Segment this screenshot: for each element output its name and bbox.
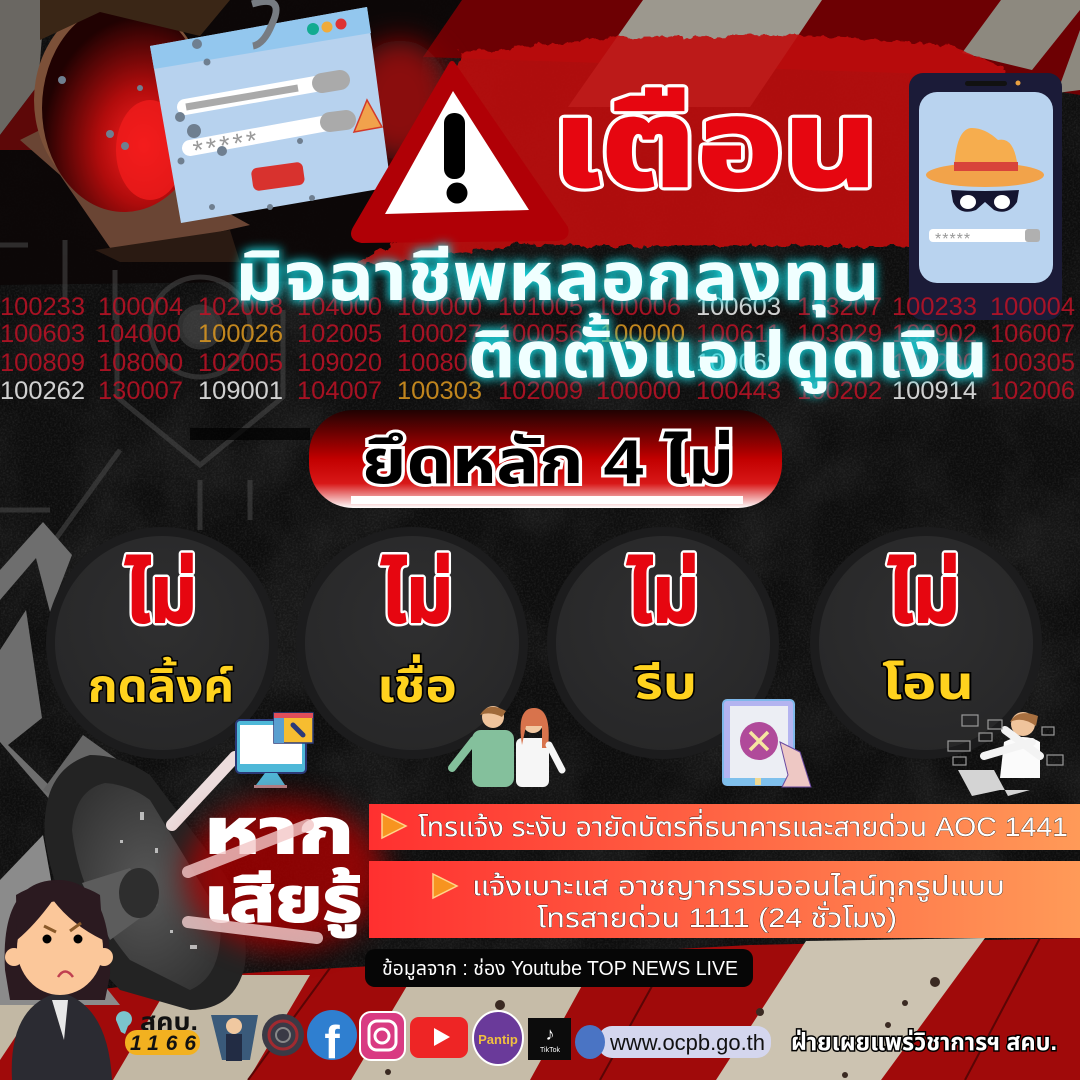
website link pill: www.ocpb.go.th <box>609 1030 765 1055</box>
panel: no believing <box>296 527 528 759</box>
logo: OCPB 1166: สคบ. <box>140 1008 198 1036</box>
code numbers grid: 101005 <box>498 293 583 321</box>
heading: if you lose money: เสียรู้ <box>204 866 362 938</box>
panel: no transferring: โอน <box>882 657 974 709</box>
heading: if you lose money: หาก <box>204 798 354 867</box>
faint arrow graphic left <box>0 522 72 800</box>
bar: report online crime hotline: โทรสายด่วน 1111 (24 ชั่วโมง) <box>537 901 897 933</box>
logo: facebook: f <box>324 1016 340 1068</box>
code numbers grid: 100262 <box>0 377 85 405</box>
source label: ข้อมูลจาก : ช่อง Youtube TOP NEWS LIVE <box>382 957 738 981</box>
banner: hold 4 no's: ยึดหลัก 4 ไม่ <box>362 428 734 497</box>
panel: no rushing: ไม่ <box>627 550 699 639</box>
icon: phone with hacker in hat: ***** <box>935 231 971 248</box>
code numbers grid: 100000 <box>397 293 482 321</box>
code numbers grid: 100809 <box>0 349 85 377</box>
logo: Pantip: Pantip <box>478 1032 518 1047</box>
panel: no clicking links: ไม่ <box>125 550 197 639</box>
heading: scam investment line 1: มิจฉาชีพหลอกลงทุน <box>235 239 880 318</box>
icon: two people talking <box>452 706 562 787</box>
code numbers grid: 100443 <box>696 377 781 405</box>
panel: no believing: ไม่ <box>381 550 453 639</box>
code numbers grid: 100914 <box>892 377 977 405</box>
code numbers grid: 100069 <box>696 349 781 377</box>
bar: report online crime hotline <box>369 861 1080 938</box>
code numbers grid: 103207 <box>797 293 882 321</box>
credit text: ฝ่ายเผยแพร่วิชาการฯ สคบ. <box>791 1028 1057 1056</box>
code numbers grid: 100303 <box>397 377 482 405</box>
panel: no rushing <box>547 527 779 759</box>
code numbers grid: 102008 <box>198 293 283 321</box>
code numbers grid: 104000 <box>297 293 382 321</box>
icon: fake login window: ***** <box>191 125 263 166</box>
icon: link on monitor <box>236 713 313 788</box>
code numbers grid: 109020 <box>297 349 382 377</box>
bar: freeze card hotline <box>369 804 1080 850</box>
code numbers grid: 100603 <box>696 293 781 321</box>
panel: no clicking links: กดลิ้งค์ <box>88 657 234 712</box>
panel: no believing: เชื่อ <box>377 654 457 712</box>
logo: youtube <box>410 1017 468 1058</box>
icon: man refusing at laptop <box>948 712 1063 796</box>
icon: fake login window <box>58 2 391 223</box>
logo: OCPB 1166 <box>116 1008 200 1055</box>
bar: freeze card hotline: โทรแจ้ง ระงับ อายัดบัตรที่ธนาคารและสายด่วน AOC 1441 <box>418 808 1068 842</box>
panel: no clicking links <box>46 527 278 759</box>
code numbers grid: 100056 <box>498 320 583 348</box>
code numbers grid: 100004 <box>98 293 183 321</box>
heading: scam investment line 1: มิจฉาชีพหลอกลงทุน <box>235 239 880 318</box>
code numbers grid: 100902 <box>892 320 977 348</box>
banner: hold 4 no's <box>190 410 782 508</box>
logo: Pantip <box>473 1011 523 1065</box>
logo: facebook <box>307 1010 357 1068</box>
code numbers grid: 100233 <box>892 293 977 321</box>
background: bottom red and wood stripes <box>0 938 1080 1080</box>
code numbers grid <box>0 293 1075 405</box>
title: warning word: เตือน <box>552 76 878 212</box>
illustration: angry woman in suit <box>5 880 113 1080</box>
code numbers grid: 103029 <box>797 320 882 348</box>
logo: instagram <box>360 1012 405 1060</box>
code numbers grid: 100004 <box>990 293 1075 321</box>
website link pill <box>575 1025 771 1059</box>
code numbers grid: 100800 <box>397 349 482 377</box>
logo: TikTok: ♪ <box>546 1024 554 1044</box>
logo: TikTok: TikTok <box>540 1047 560 1054</box>
logo: cartoon mascot <box>211 1015 258 1061</box>
code numbers grid: 100026 <box>198 320 283 348</box>
heading: scam investment line 2: ติดตั้งแอปดูดเงิน <box>468 312 988 394</box>
icon: tablet with cross <box>723 700 811 787</box>
code numbers grid: 102005 <box>297 320 382 348</box>
heading: scam investment line 2: ติดตั้งแอปดูดเงิน <box>468 312 988 394</box>
code numbers grid: 100006 <box>596 293 681 321</box>
code numbers grid: 102006 <box>990 377 1075 405</box>
faint security shield graphic <box>0 240 283 540</box>
logo: OCPB circle <box>262 1014 304 1056</box>
code numbers grid: 100000 <box>600 320 685 348</box>
code numbers grid: 100233 <box>0 293 85 321</box>
panel: no clicking links: ไม่ <box>125 550 197 639</box>
heading: if you lose money <box>185 798 385 950</box>
code numbers grid: 104000 <box>96 320 181 348</box>
code numbers grid: 108000 <box>98 349 183 377</box>
sound lines of megaphone: lower <box>188 825 317 938</box>
panel: no believing: ไม่ <box>381 550 453 639</box>
logo: TikTok <box>528 1018 571 1060</box>
code numbers grid: 102005 <box>198 349 283 377</box>
code numbers grid: 104007 <box>297 377 382 405</box>
code numbers grid: 100603 <box>0 320 85 348</box>
code numbers grid: 100202 <box>797 377 882 405</box>
title: warning word: เตือน <box>552 76 878 212</box>
panel: no rushing: รีบ <box>634 657 697 709</box>
illustration: megaphone <box>0 735 246 1010</box>
code numbers grid: 102009 <box>498 377 583 405</box>
source label <box>365 949 753 987</box>
background: traffic light lamp <box>20 0 250 262</box>
background: top red and wood stripes <box>0 0 1080 160</box>
panel: no rushing: ไม่ <box>627 550 699 639</box>
background: red brush band behind title <box>350 35 1005 268</box>
logo: OCPB 1166: 1166 <box>130 1032 196 1055</box>
panel: no transferring: ไม่ <box>888 550 960 639</box>
code numbers grid: 106007 <box>990 320 1075 348</box>
panel: no transferring <box>810 527 1042 759</box>
panel: no transferring: ไม่ <box>888 550 960 639</box>
icon: warning triangle <box>354 64 566 240</box>
code numbers grid: 100200 <box>892 349 977 377</box>
code numbers grid: 100611 <box>696 320 781 348</box>
code numbers grid: 100305 <box>990 349 1075 377</box>
icon: phone with hacker in hat <box>909 73 1062 320</box>
code numbers grid: 100000 <box>596 377 681 405</box>
code numbers grid: 109001 <box>198 377 283 405</box>
code numbers grid: 130007 <box>98 377 183 405</box>
bar: report online crime hotline: แจ้งเบาะแส อาชญากรรมออนไลน์ทุกรูปแบบ <box>472 871 1005 902</box>
sound line: top <box>172 757 235 825</box>
code numbers grid: 100027 <box>397 320 482 348</box>
